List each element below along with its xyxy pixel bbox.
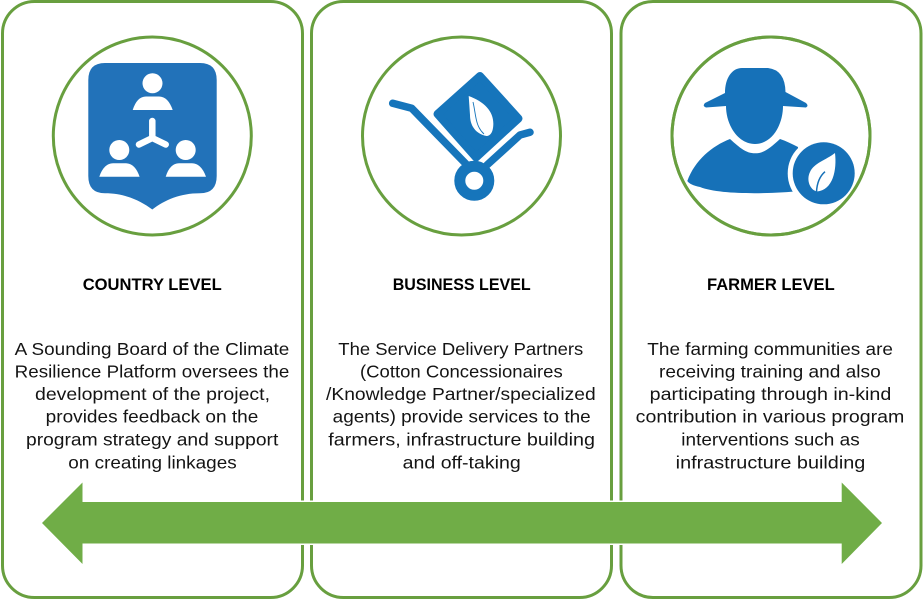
text block: farmer level description: participating through in-kind — [650, 384, 891, 404]
text block: farmer level description — [636, 339, 904, 472]
text block: country level description: development of the project, — [35, 384, 270, 404]
arrow: double-headed green arrow — [42, 482, 882, 564]
text block: business level description: (Cotton Concessionaires — [360, 362, 563, 382]
text block: farmer level description: interventions such as — [681, 430, 860, 450]
text block: farmer level description: The farming communities are — [647, 339, 893, 359]
text block: business level description: /Knowledge Partner/specialized — [326, 384, 596, 404]
text block: farmer level description: contribution in various program — [636, 407, 904, 427]
text block: country level description: on creating linkages — [68, 452, 237, 472]
panel: business level — [312, 2, 612, 598]
text block: business level description: The Service Delivery Partners — [338, 339, 584, 359]
icon: farmer with leaf badge — [672, 37, 870, 235]
text block: business level description: and off-taking — [403, 452, 521, 472]
text block: farmer level description: infrastructure building — [676, 452, 865, 472]
text block: country level description: A Sounding Board of the Climate — [15, 339, 289, 359]
text block: business level description: farmers, infrastructure building — [328, 430, 595, 450]
text block: country level description: Resilience Platform oversees the — [15, 362, 289, 382]
text block: country level description: program strategy and support — [26, 430, 278, 450]
text block: business level description: agents) provide services to the — [333, 407, 591, 427]
text block: farmer level description: receiving training and also — [659, 362, 881, 382]
panel: farmer level — [621, 2, 921, 598]
heading: country level: COUNTRY LEVEL — [83, 275, 222, 294]
text block: country level description: provides feedback on the — [46, 407, 258, 427]
heading: business level: BUSINESS LEVEL — [393, 275, 531, 294]
text block: business level description — [326, 339, 596, 472]
heading: farmer level: FARMER LEVEL — [707, 275, 835, 294]
icon: country level shield with people — [53, 37, 251, 235]
text block: country level description — [15, 339, 289, 472]
panel: country level — [2, 2, 302, 598]
icon: hand truck with leaf box — [362, 37, 560, 235]
